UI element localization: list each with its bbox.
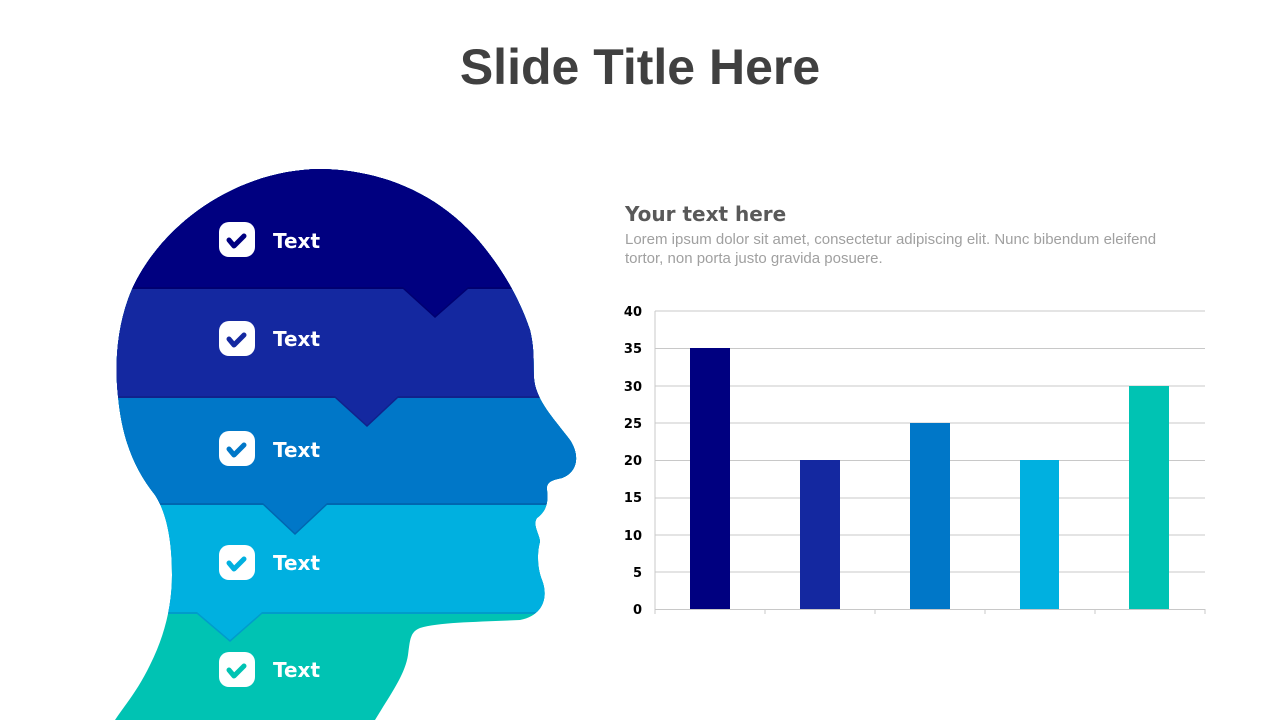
item 3: Text	[273, 438, 320, 462]
band 4	[116, 169, 576, 642]
item 1: Text	[273, 229, 320, 253]
item 4: Text	[273, 551, 320, 575]
bar chart	[624, 305, 1206, 618]
item 5: Text	[273, 658, 320, 682]
axis labels: 5	[633, 566, 642, 581]
title: Slide Title Here	[460, 39, 820, 95]
item 5	[219, 652, 320, 687]
subheading: Your text here	[625, 202, 786, 226]
axis labels: 40	[624, 305, 642, 320]
band 2	[116, 169, 540, 427]
axis labels: 25	[624, 417, 642, 432]
bars	[690, 348, 1169, 609]
band 1	[132, 169, 512, 318]
item 2: Text	[273, 327, 320, 351]
axis labels: 0	[633, 603, 642, 618]
item 4	[219, 545, 320, 580]
band 3	[116, 169, 576, 535]
item 3	[219, 431, 320, 466]
axis labels: 15	[624, 491, 642, 506]
axis labels: 35	[624, 342, 642, 357]
axis labels: 30	[624, 380, 642, 395]
axis labels	[624, 305, 642, 618]
item 1	[219, 222, 320, 257]
axis labels: 20	[624, 454, 642, 469]
body text: Lorem ipsum dolor sit amet, consectetur adipiscing elit. Nunc bibendum eleifend tortor, non porta justo gravida posuere.	[625, 231, 1156, 267]
head infographic	[115, 169, 576, 720]
band 5	[115, 169, 576, 720]
axis labels: 10	[624, 529, 642, 544]
item 2	[219, 321, 320, 356]
